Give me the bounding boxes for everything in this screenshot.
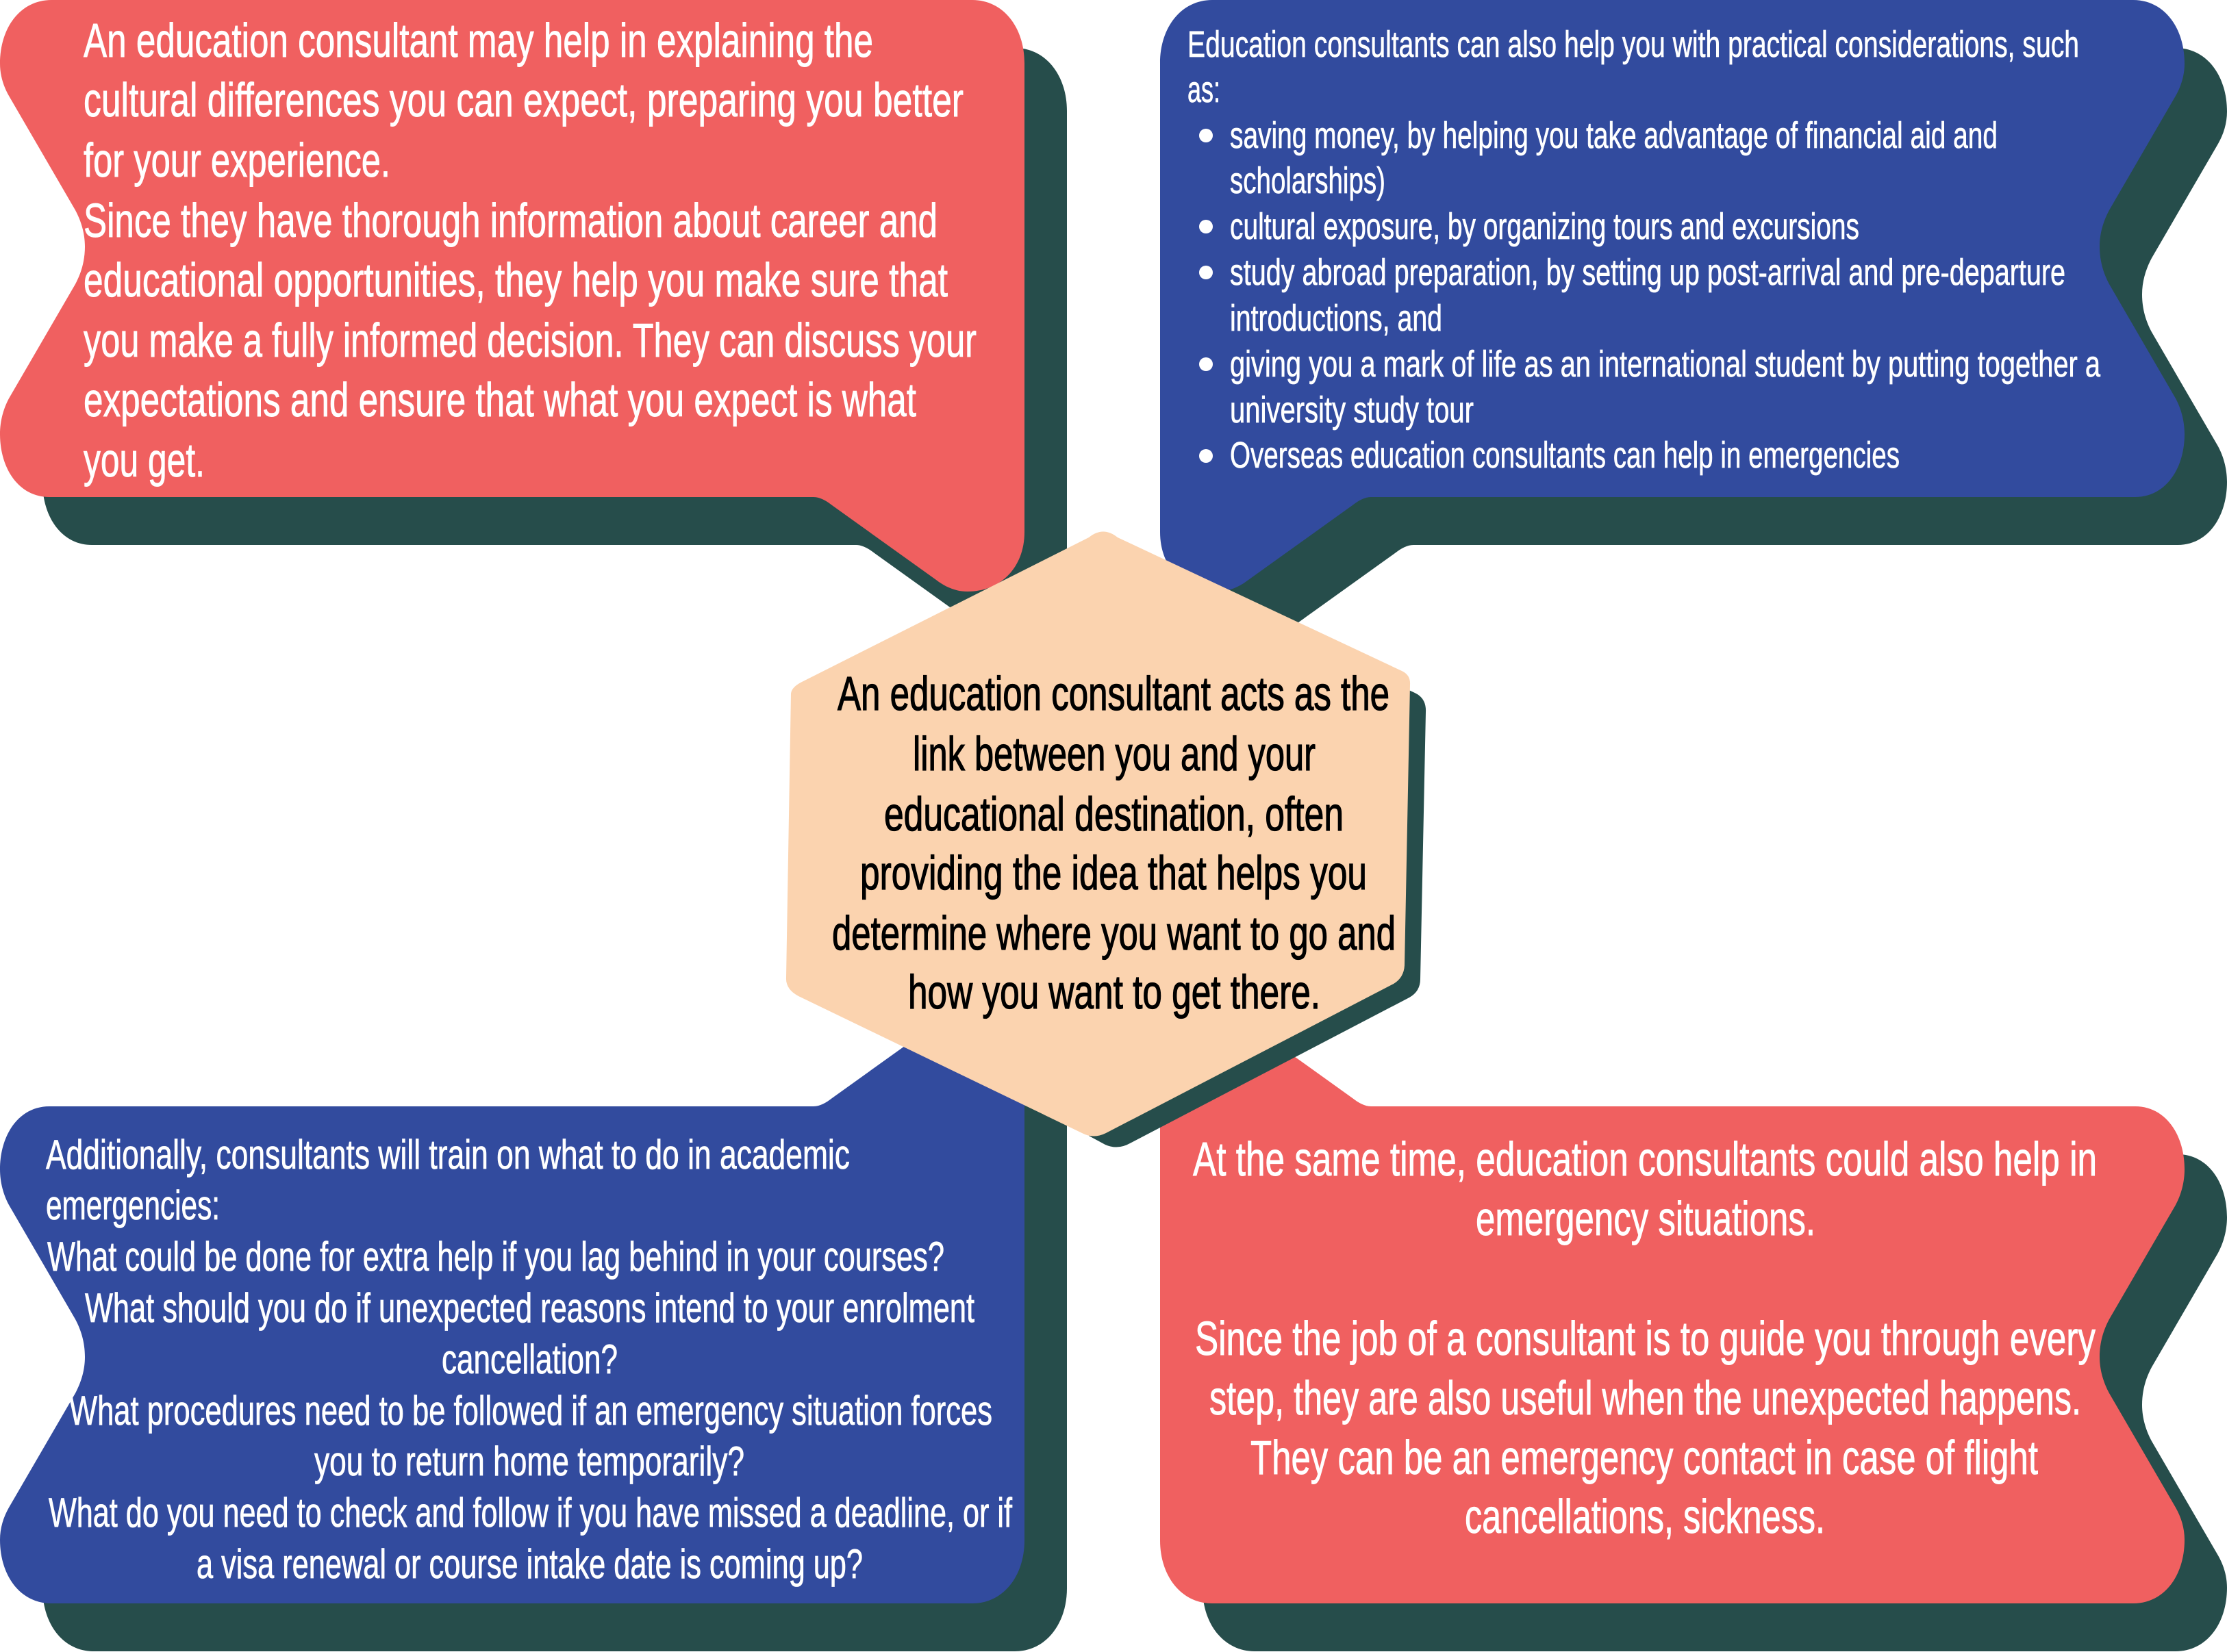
- text block: as:: [1187, 69, 1220, 110]
- text block: cancellation?: [442, 1336, 618, 1382]
- hexagon shape: [786, 531, 1410, 1136]
- hexagon text: determine where you want to go and: [832, 906, 1396, 960]
- text block: cultural differences you can expect, preparing you better: [84, 73, 964, 127]
- text block: university study tour: [1230, 390, 1474, 431]
- text block: introductions, and: [1230, 298, 1442, 339]
- text block: cancellations, sickness.: [1465, 1490, 1825, 1543]
- text block: educational opportunities, they help you make sure that: [84, 253, 948, 307]
- text block: What do you need to check and follow if you have missed a deadline, or if: [49, 1490, 1012, 1536]
- text block: emergencies:: [46, 1182, 220, 1228]
- text block: scholarships): [1230, 160, 1385, 201]
- speech bubble: [0, 1012, 1024, 1603]
- text block: [46, 1132, 1012, 1587]
- central hexagon: [786, 531, 1426, 1147]
- text block: [1193, 1132, 2097, 1543]
- panel shadow: [1203, 48, 2227, 639]
- speech bubble: [0, 0, 1024, 592]
- text block: a visa renewal or course intake date is coming up?: [197, 1541, 863, 1587]
- panel: practical considerations (top right): [1160, 0, 2227, 639]
- text block: you to return home temporarily?: [314, 1438, 744, 1484]
- hexagon text: [832, 667, 1396, 1019]
- hexagon shadow: [1089, 685, 1426, 1147]
- panel shadow: [42, 48, 1067, 639]
- text block: Overseas education consultants can help in emergencies: [1230, 435, 1900, 476]
- text block: emergency situations.: [1476, 1192, 1815, 1245]
- text block: Since they have thorough information about career and: [84, 194, 938, 247]
- speech bubble: [1160, 1012, 2185, 1603]
- hexagon text: how you want to get there.: [908, 965, 1320, 1019]
- panel: cultural differences (top left): [0, 0, 1067, 639]
- text block: [84, 14, 977, 487]
- text block: [1187, 24, 2101, 476]
- panel: emergency situations (bottom right): [1160, 1012, 2227, 1651]
- hexagon text: An education consultant acts as the: [838, 667, 1389, 720]
- text block: for your experience.: [84, 134, 390, 187]
- text block: cultural exposure, by organizing tours and excursions: [1230, 206, 1859, 247]
- text block: expectations and ensure that what you expect is what: [84, 373, 916, 427]
- text block: What procedures need to be followed if an emergency situation forces: [69, 1388, 992, 1434]
- hexagon text: link between you and your: [913, 727, 1316, 780]
- text block: you get.: [84, 433, 205, 487]
- text block: What should you do if unexpected reasons intend to your enrolment: [85, 1285, 974, 1331]
- hexagon text: educational destination, often: [884, 787, 1344, 841]
- panel shadow: [42, 1060, 1067, 1651]
- panel: academic emergencies (bottom left): [0, 1012, 1067, 1651]
- text block: What could be done for extra help if you lag behind in your courses?: [47, 1234, 944, 1280]
- panel shadow: [1203, 1060, 2227, 1651]
- text block: An education consultant may help in explaining the: [84, 14, 873, 67]
- speech bubble: [1160, 0, 2185, 592]
- hexagon text: providing the idea that helps you: [860, 846, 1367, 900]
- text block: Additionally, consultants will train on what to do in academic: [46, 1132, 850, 1178]
- text block: you make a fully informed decision. They can discuss your: [84, 314, 977, 367]
